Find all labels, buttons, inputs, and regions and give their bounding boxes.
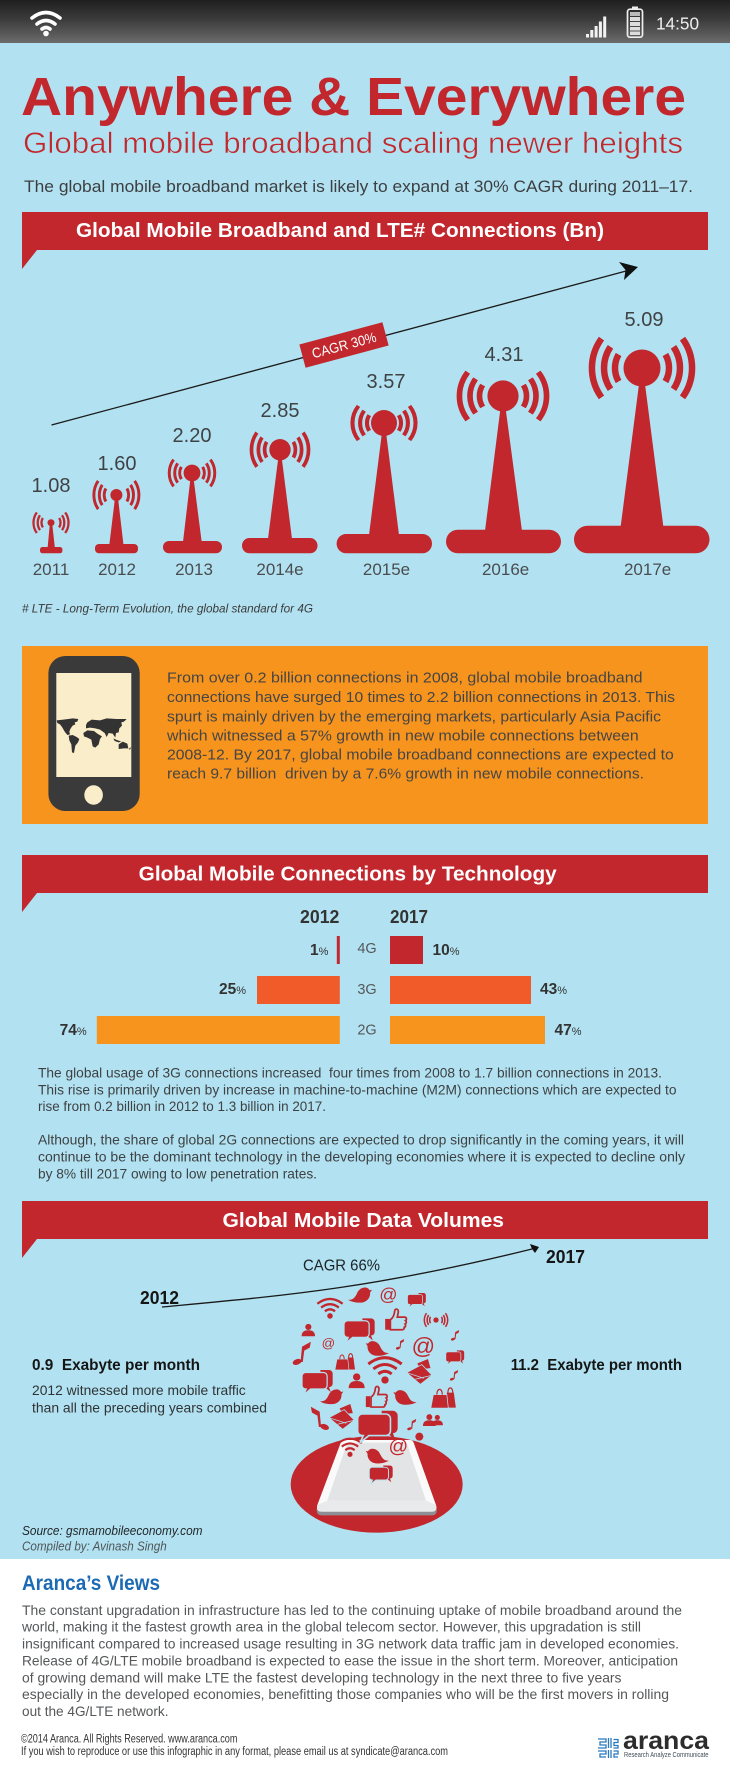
thumbs up	[366, 1309, 406, 1407]
tower 2014e	[242, 433, 318, 553]
text block: technology commentary: by 8% till 2017 owing to low penetration rates.	[38, 1165, 317, 1181]
icon: battery	[628, 6, 642, 37]
text block: technology commentary	[38, 1064, 685, 1181]
heading banner: connections: Global Mobile Broadband and LTE# Connections (Bn)	[76, 220, 604, 242]
icon: signal bars	[586, 16, 606, 38]
illustration: phone emitting social icons	[291, 1285, 464, 1533]
year labels: 2014e	[256, 560, 304, 579]
percent labels: 43%	[540, 981, 567, 998]
logo mark	[598, 1738, 618, 1758]
text block: technology commentary: Although, the share of global 2G connections are expected to drop significantly in the coming years, it will	[38, 1132, 684, 1148]
views text: especially in the developed economies, benefitting those companies who will be the first movers in rolling	[22, 1686, 669, 1702]
value labels: 2.85	[261, 400, 299, 422]
title: Anywhere & Everywhere	[21, 67, 686, 127]
logo: aranca: aranca	[623, 1727, 710, 1755]
technology labels	[357, 941, 377, 1039]
arrow: CAGR trend	[52, 262, 638, 425]
floating at signs: @	[379, 1285, 397, 1305]
percent labels: 47%	[554, 1022, 582, 1039]
source: Compiled by: Avinash Singh	[22, 1539, 167, 1554]
floating birds	[320, 1288, 417, 1405]
source	[22, 1523, 203, 1554]
bars 2012	[97, 936, 340, 1044]
value labels: 1.08	[32, 475, 70, 497]
year labels	[33, 560, 671, 579]
callout: 2017 volume: 11.2 Exabyte per month	[511, 1357, 682, 1374]
chart: data volume arrow: CAGR 66%	[303, 1258, 380, 1275]
people	[302, 1324, 443, 1441]
year headers: 2017	[390, 907, 428, 927]
intro line: The global mobile broadband market is likely to expand at 30% CAGR during 2011–17.	[24, 178, 693, 196]
text block: technology commentary: continue to be the dominant technology in the developing economies where it is expected to decline only	[38, 1148, 685, 1164]
summary text: connections have surged 10 times to 2.2 billion connections in 2013. This	[167, 689, 675, 706]
icons on device: @	[389, 1436, 408, 1457]
tower 2016e	[446, 372, 561, 553]
views text: out the 4G/LTE network.	[22, 1703, 168, 1719]
value labels: 4.31	[485, 344, 523, 366]
copyright footer: If you wish to reproduce or use this infographic in any format, please email us at syndicate@aranca.com	[21, 1746, 448, 1758]
views heading: Aranca’s Views	[22, 1572, 160, 1595]
chart: tower pictograms	[32, 309, 710, 579]
tower 2013	[163, 460, 222, 553]
copyright footer	[21, 1734, 448, 1758]
heading banner: connections	[22, 212, 708, 269]
value labels: 2.20	[173, 425, 211, 447]
year headers: 2012	[300, 907, 339, 927]
percent labels	[60, 942, 582, 1039]
CAGR 30% tag: CAGR 30%	[310, 329, 378, 361]
logo: aranca	[598, 1727, 710, 1759]
technology labels: 4G	[357, 941, 377, 957]
tower 2011	[33, 512, 69, 553]
tower 2015e	[337, 406, 432, 553]
clock: 14:50	[656, 14, 699, 34]
wifi and signal	[317, 1299, 448, 1384]
views text: Release of 4G/LTE mobile broadband is expected to ease the issue in the short term. Moreover, anticipation	[22, 1653, 678, 1669]
percent labels: 10%	[432, 942, 460, 959]
red ellipse	[291, 1436, 463, 1533]
icons on device	[338, 1436, 408, 1484]
tower 2012	[94, 481, 139, 553]
value labels	[32, 309, 663, 497]
floating at signs	[322, 1285, 435, 1359]
floating at signs: @	[322, 1335, 335, 1350]
percent labels: 1%	[310, 942, 329, 959]
chart: connections by technology	[60, 907, 582, 1044]
percent labels: 25%	[219, 981, 246, 998]
CAGR 30% tag	[299, 322, 389, 368]
copyright footer: ©2014 Aranca. All Rights Reserved. www.aranca.com	[21, 1734, 237, 1746]
panel: Aranca's views	[0, 1559, 730, 1772]
year labels: 2011	[33, 560, 69, 579]
icon: smartphone with world map	[48, 656, 140, 811]
music notes	[292, 1330, 459, 1431]
source: Source: gsmamobileeconomy.com	[22, 1523, 203, 1538]
year labels: 2016e	[482, 560, 529, 579]
footnote: # LTE - Long-Term Evolution, the global standard for 4G	[22, 602, 313, 616]
callout: 2012 volume: 0.9 Exabyte per month	[32, 1357, 200, 1374]
summary text	[166, 670, 675, 783]
year labels: 2017e	[624, 560, 671, 579]
summary text: reach 9.7 billion driven by a 7.6% growth in new mobile connections.	[167, 766, 644, 783]
views text: world, making it the fastest growth area in the global telecom sector. However, this upgradation is still	[21, 1619, 641, 1635]
panel: orange summary	[22, 646, 708, 824]
summary text: which witnessed a 57% growth in new mobile connections between	[166, 728, 639, 745]
year labels: 2012	[98, 560, 136, 579]
year labels: 2015e	[363, 560, 410, 579]
envelopes	[329, 1359, 432, 1429]
tower 2017e	[574, 339, 710, 553]
icon: world map	[57, 718, 131, 753]
heading banner: technology: Global Mobile Connections by Technology	[139, 864, 558, 886]
shopping bags	[335, 1354, 456, 1408]
chart: data volume arrow: 2012	[140, 1288, 179, 1308]
subtitle: Global mobile broadband scaling newer heights	[23, 127, 683, 160]
chart: data volume arrow	[140, 1244, 585, 1308]
year headers	[300, 907, 428, 927]
value labels: 5.09	[625, 309, 663, 331]
tablet device	[317, 1440, 437, 1515]
heading banner: data volumes	[22, 1201, 708, 1258]
summary text: 2008-12. By 2017, global mobile broadband connections are expected to	[167, 747, 674, 764]
summary text: From over 0.2 billion connections in 2008, global mobile broadband	[167, 670, 642, 687]
views text: The constant upgradation in infrastructure has led to the continuing uptake of mobile broadband around the	[22, 1602, 682, 1618]
text block: technology commentary: This rise is primarily driven by increase in machine-to-machine (M2M) connections which are expected to	[38, 1081, 677, 1097]
technology labels: 2G	[357, 1023, 377, 1039]
callout: 2012 volume	[32, 1357, 267, 1415]
icon: wifi	[32, 12, 60, 36]
summary text: spurt is mainly driven by the emerging markets, particularly Asia Pacific	[167, 708, 662, 725]
value labels: 3.57	[367, 371, 405, 393]
technology labels: 3G	[357, 982, 377, 998]
chart: data volume arrow: 2017	[546, 1247, 585, 1267]
status bar	[0, 0, 730, 43]
views text: of growing demand will make LTE the fastest developing technology in the next three to five years	[22, 1669, 622, 1685]
heading banner: technology	[22, 855, 708, 912]
heading banner: data volumes: Global Mobile Data Volumes	[222, 1210, 504, 1232]
text block: technology commentary: rise from 0.2 billion in 2012 to 1.3 billion in 2017.	[38, 1098, 326, 1114]
callout: 2012 volume: 2012 witnessed more mobile traffic	[32, 1382, 246, 1398]
logo: aranca: Research Analyze Communicate	[624, 1750, 708, 1759]
views text	[21, 1602, 682, 1719]
value labels: 1.60	[98, 453, 136, 475]
floating chat bubbles	[302, 1293, 464, 1443]
floating at signs: @	[411, 1333, 435, 1359]
percent labels: 74%	[60, 1022, 87, 1039]
bars 2017	[390, 936, 545, 1044]
text block: technology commentary: The global usage of 3G connections increased four times from 2008 to 1.7 billion connections in 2013.	[38, 1064, 662, 1080]
year labels: 2013	[175, 560, 213, 579]
callout: 2012 volume: than all the preceding years combined	[32, 1399, 267, 1415]
views text: insignificant compared to increased usage resulting in 3G network data traffic jam in developed economies.	[22, 1636, 679, 1652]
